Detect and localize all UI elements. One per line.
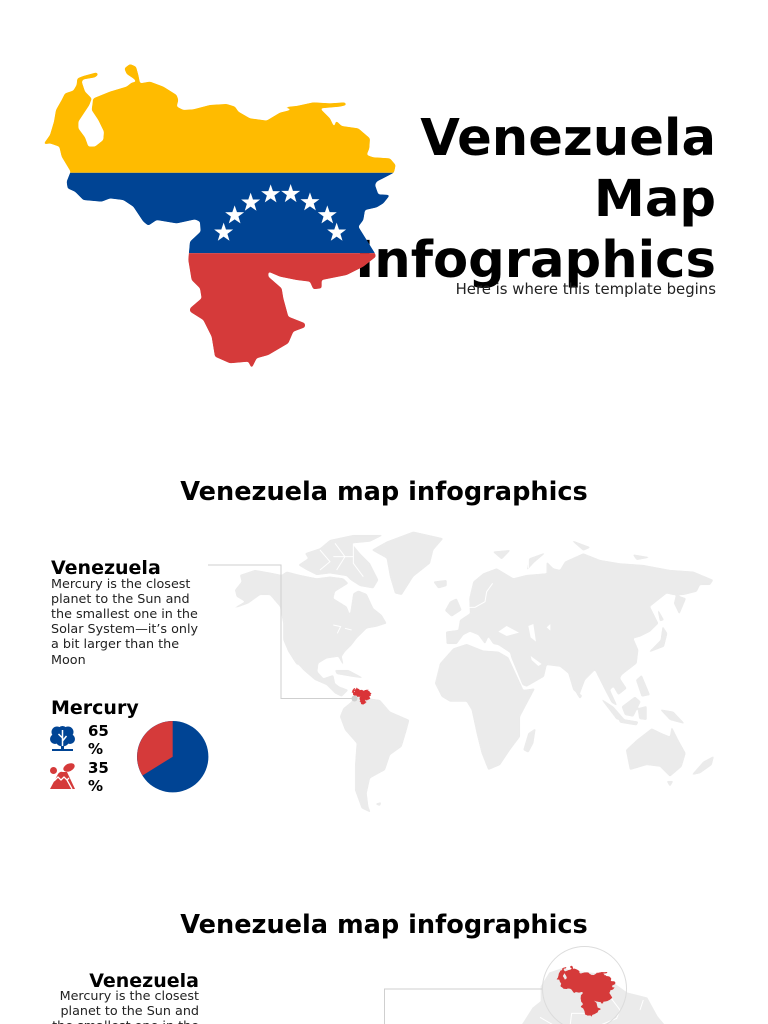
text block: Venezuela: Mercury is the closest	[51, 576, 190, 592]
icon: volcano	[50, 763, 75, 789]
text: 35 %	[88, 759, 109, 794]
text block: Venezuela: Solar System—it’s only	[51, 622, 198, 637]
title: Infographics	[355, 230, 716, 290]
text block: Venezuela: Venezuela	[51, 557, 161, 579]
pie chart	[137, 721, 208, 792]
highlighted Venezuela on world map	[352, 688, 371, 704]
text: 65 %: %	[88, 740, 103, 758]
text block: Venezuela, lower: Mercury is the closest	[60, 989, 199, 1004]
title: Venezuela	[420, 108, 716, 168]
text block: Venezuela, lower	[52, 970, 199, 1024]
subtitle: Here is where this template begins	[456, 280, 716, 298]
title	[355, 108, 716, 290]
heading: Mercury: Mercury	[51, 697, 139, 719]
flag map of Venezuela	[44, 64, 396, 367]
icon: tree	[50, 726, 75, 751]
text: 65 %: 65	[88, 722, 109, 740]
text block: Venezuela, lower: Venezuela	[89, 970, 199, 992]
section heading: Venezuela map infographics	[180, 910, 588, 940]
text block: Venezuela, lower: planet to the Sun and	[60, 1004, 199, 1019]
South America land	[522, 969, 665, 1024]
lens circle	[542, 946, 626, 1024]
text: 35 %: %	[88, 776, 103, 794]
zoomed map	[384, 946, 664, 1024]
text block: Venezuela	[51, 557, 198, 668]
section heading: Venezuela map infographics	[180, 477, 588, 507]
text block: Venezuela: the smallest one in the	[51, 607, 198, 622]
text block: Venezuela: Moon	[51, 653, 86, 668]
text block: Venezuela: a bit larger than the	[51, 637, 179, 652]
connector line	[208, 565, 358, 702]
text: 65 %	[88, 722, 109, 758]
text block: Venezuela: planet to the Sun and	[51, 592, 190, 607]
connector line	[384, 989, 542, 1024]
world map	[208, 532, 714, 812]
highlighted Venezuela	[557, 966, 615, 1016]
title: Map	[594, 168, 716, 228]
text: 35 %: 35	[88, 759, 109, 777]
